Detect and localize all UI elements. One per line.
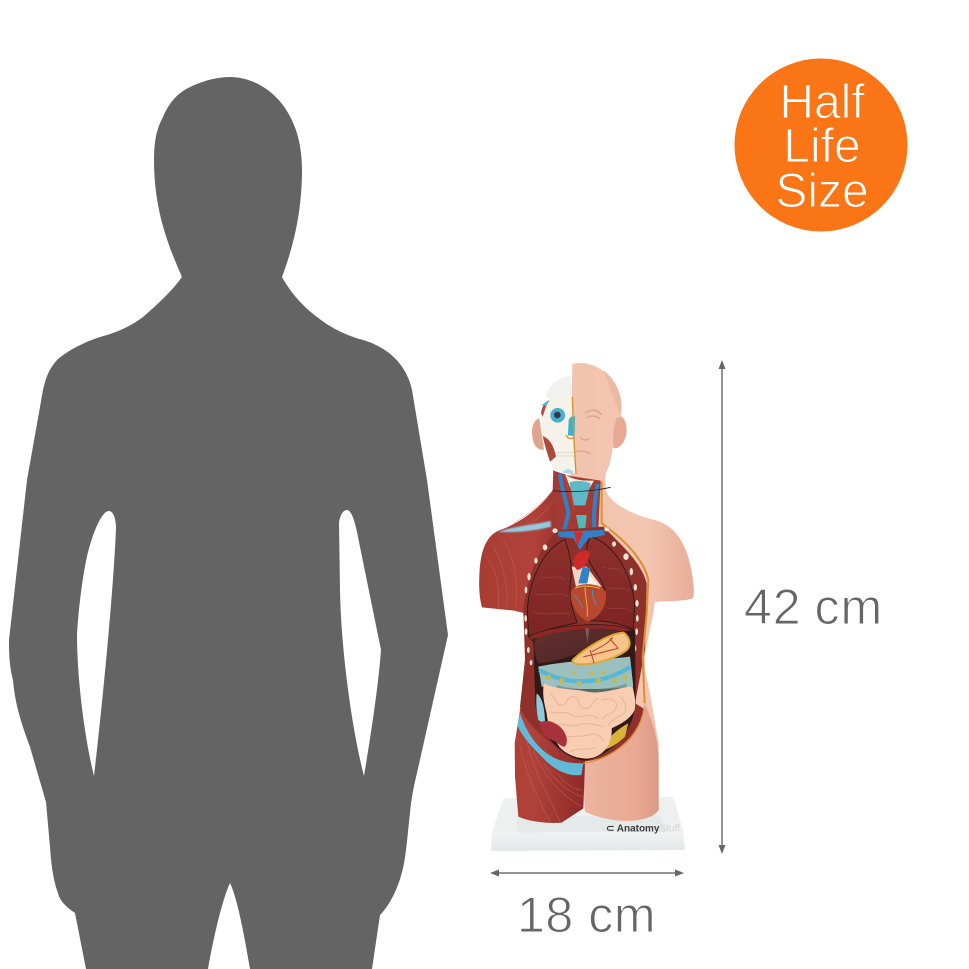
right lung [587, 537, 635, 629]
neck vessels and thyroid [553, 471, 601, 532]
hip shading [583, 703, 659, 821]
half life size badge: Half [779, 76, 865, 129]
abdominal cavity [533, 630, 636, 761]
model base: ⊂ AnatomyStuff [606, 824, 680, 835]
yellow colon [604, 723, 628, 750]
hair and face shading [603, 370, 621, 416]
skin half of body [570, 363, 694, 821]
colon band [538, 657, 633, 689]
left blue peritoneum [536, 693, 545, 725]
height label: 42 cm [744, 579, 883, 635]
anatomy torso model [479, 363, 694, 851]
half life size badge: Life [783, 120, 861, 173]
small intestine [543, 683, 635, 759]
half life size badge [734, 58, 908, 232]
height arrow [718, 360, 726, 854]
left lung [527, 539, 577, 637]
neck thread [553, 487, 611, 492]
colon dots [546, 670, 628, 686]
skull [532, 376, 576, 474]
caecum [539, 721, 567, 747]
diaphragm [528, 625, 634, 643]
heart and great vessels [571, 550, 606, 622]
model base [491, 797, 685, 851]
human silhouette [9, 77, 448, 969]
chest wall [520, 527, 647, 762]
shoulder blue stripe [498, 521, 551, 532]
right ear [613, 417, 627, 448]
lower blue band [517, 713, 583, 775]
rib dots [524, 527, 639, 665]
shaded colon [557, 683, 627, 692]
stomach [573, 633, 630, 664]
liver [535, 628, 617, 663]
intestine folds [550, 693, 626, 752]
left muscle half [479, 470, 585, 823]
width label: 18 cm [517, 887, 656, 943]
half life size badge: Size [775, 165, 869, 218]
width arrow [490, 870, 684, 876]
orange seam [602, 482, 648, 703]
muscle striations [487, 493, 583, 822]
colon highlight [539, 667, 631, 681]
great vessels crossing clavicle [558, 530, 605, 550]
face detail [576, 410, 602, 454]
lung texture [533, 567, 632, 615]
liver sheen [585, 628, 589, 643]
